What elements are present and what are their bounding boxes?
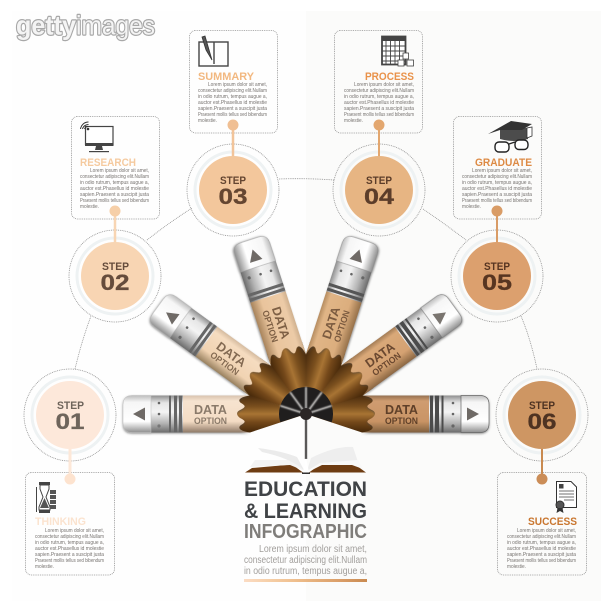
step 05 label: STEP xyxy=(484,261,510,273)
icon: hourglass xyxy=(36,482,56,513)
step 01 label: STEP xyxy=(57,400,84,412)
step 05 disc xyxy=(463,242,531,310)
book illustration xyxy=(245,447,366,474)
step 02: research xyxy=(69,116,161,322)
body text: process: in odio rutrum, tempus augue a, xyxy=(344,94,414,100)
body text: success: auctor est.Phasellus id molestie xyxy=(507,546,576,552)
step 02 ring xyxy=(69,230,161,322)
step 04 disc xyxy=(345,156,413,224)
step 05 label xyxy=(482,261,512,295)
step 03 label: STEP xyxy=(220,175,246,187)
icon: calculator and blocks xyxy=(382,36,414,66)
pencil 5 xyxy=(295,291,465,429)
watermark: getty images logo: images xyxy=(76,10,155,40)
body text: graduate: Lorem ipsum dolor sit amet, xyxy=(472,168,532,174)
step 04: process xyxy=(333,30,425,236)
body text: summary: auctor est.Phasellus id molestie xyxy=(198,100,267,106)
body text: research xyxy=(80,168,149,210)
body text: thinking: molestie. xyxy=(35,564,54,570)
step 06 connector xyxy=(536,449,548,484)
pencil 5: DATA xyxy=(363,340,398,371)
step 03 disc xyxy=(199,156,267,224)
step 01 label: 01 xyxy=(56,409,84,434)
step 03 label: 03 xyxy=(218,184,248,209)
step 02 label xyxy=(100,261,130,295)
watermark: getty images logo: getty xyxy=(16,10,76,40)
step 06 label: STEP xyxy=(529,400,555,412)
body text: summary: Praesent mollis tellus sed bibendum xyxy=(198,112,267,118)
pencil 4: DATA xyxy=(320,305,343,341)
heading: summary: SUMMARY xyxy=(198,71,255,83)
pencil 3: OPTION xyxy=(260,309,280,344)
body text: success: Praesent mollis tellus sed bibendum xyxy=(507,558,576,564)
watermark: getty images logo xyxy=(16,10,155,40)
body text: research: sapien.Praesent a suscipit justa xyxy=(80,192,149,198)
pencil 1 xyxy=(123,396,306,432)
body text: summary: Lorem ipsum dolor sit amet, xyxy=(208,82,267,88)
body text: success: in odio rutrum, tempus augue a, xyxy=(507,540,576,546)
body text: process: Praesent mollis tellus sed bibendum xyxy=(344,112,414,118)
pencil 5: OPTION xyxy=(370,350,403,378)
body text: thinking: in odio rutrum, tempus augue a, xyxy=(35,540,104,546)
body text: graduate: Praesent mollis tellus sed bibendum xyxy=(462,198,532,204)
step 02 label: STEP xyxy=(102,261,129,273)
body text: graduate: molestie. xyxy=(462,204,481,210)
step 06 disc xyxy=(508,381,576,449)
pencil 4 xyxy=(288,234,380,420)
body text: research: molestie. xyxy=(80,204,99,210)
heading: success: SUCCESS xyxy=(528,516,577,528)
body text: research: Praesent mollis tellus sed bibendum xyxy=(80,198,149,204)
intro text: in odio rutrum, tempus augue a, xyxy=(244,566,367,577)
icon: book and pen xyxy=(199,36,228,66)
step 03 label xyxy=(218,175,248,209)
info box: thinking xyxy=(26,472,114,575)
step 01: thinking xyxy=(24,369,116,575)
body text: thinking: sapien.Praesent a suscipit justa xyxy=(35,552,104,558)
step 01 connector xyxy=(64,449,76,484)
pencil 4: OPTION xyxy=(332,309,352,344)
heading: graduate: GRADUATE xyxy=(475,157,532,169)
step 01 disc xyxy=(36,381,104,449)
step 06 ring xyxy=(496,369,588,461)
intro text: consectetur adipiscing elit.Nullam xyxy=(244,555,367,566)
body text: process: Lorem ipsum dolor sit amet, xyxy=(354,82,414,88)
body text: graduate xyxy=(462,168,532,210)
body text: thinking: Lorem ipsum dolor sit amet, xyxy=(45,528,104,534)
body text: research: consectetur adipiscing elit.Nullam xyxy=(80,174,149,180)
stem from hub to book xyxy=(300,408,312,459)
step 06 label: 06 xyxy=(528,409,556,434)
step 05 label: 05 xyxy=(482,270,512,295)
body text: thinking: Praesent mollis tellus sed bibendum xyxy=(35,558,104,564)
heading: research: RESEARCH xyxy=(80,157,136,169)
body text: summary xyxy=(198,82,267,124)
step 03 ring xyxy=(187,144,279,236)
step 02 label: 02 xyxy=(100,270,130,295)
body text: success: consectetur adipiscing elit.Nullam xyxy=(507,534,576,540)
step 03: summary xyxy=(187,30,279,236)
step 06 label xyxy=(528,400,556,434)
step 03 connector xyxy=(228,120,238,158)
main title: EDUCATION xyxy=(244,478,367,501)
info box: summary xyxy=(190,30,278,133)
body text: graduate: consectetur adipiscing elit.Nullam xyxy=(462,174,532,180)
step 06: success xyxy=(496,369,588,575)
body text: graduate: in odio rutrum, tempus augue a, xyxy=(462,180,532,186)
step 01 ring xyxy=(24,369,116,461)
body text: research: in odio rutrum, tempus augue a, xyxy=(80,180,149,186)
step 02 disc xyxy=(81,242,149,310)
icon: monitor with wifi xyxy=(80,122,114,152)
body text: summary: sapien.Praesent a suscipit justa xyxy=(198,106,267,112)
main title: & LEARNING xyxy=(244,500,367,523)
body text: thinking xyxy=(35,528,104,570)
body text: summary: consectetur adipiscing elit.Nullam xyxy=(198,88,267,94)
body text: process: molestie. xyxy=(344,118,363,124)
step 05: graduate xyxy=(451,116,543,322)
heading: thinking: THINKING xyxy=(35,516,86,528)
body text: thinking: auctor est.Phasellus id molestie xyxy=(35,546,104,552)
body text: research: Lorem ipsum dolor sit amet, xyxy=(90,168,149,174)
dotted connectors between steps xyxy=(75,179,537,369)
body text: research: auctor est.Phasellus id molestie xyxy=(80,186,149,192)
pencil fan xyxy=(123,234,489,432)
pencil 3 xyxy=(232,234,324,420)
heading: process: PROCESS xyxy=(365,71,414,83)
main title xyxy=(244,478,367,543)
intro text: Lorem ipsum dolor sit amet, xyxy=(259,544,367,555)
body text: success: Lorem ipsum dolor sit amet, xyxy=(517,528,576,534)
pencil 3: DATA xyxy=(269,305,292,341)
pencil lead highlights xyxy=(280,387,332,414)
step 05 ring xyxy=(451,230,543,322)
step 02 connector xyxy=(110,206,120,243)
body text: graduate: sapien.Praesent a suscipit justa xyxy=(462,192,532,198)
body text: summary: molestie. xyxy=(198,118,217,124)
body text: process: sapien.Praesent a suscipit justa xyxy=(344,106,414,112)
step 04 label: STEP xyxy=(366,175,392,187)
step 04 ring xyxy=(333,144,425,236)
icon: certificate with seal xyxy=(556,482,576,513)
step 01 label xyxy=(56,400,84,434)
step 04 connector xyxy=(374,120,384,158)
gradient colour bar xyxy=(244,579,367,582)
main title: INFOGRAPHIC xyxy=(244,521,367,543)
icon: graduation cap and glasses xyxy=(488,121,532,152)
pencil 2 xyxy=(147,291,317,429)
pencil 1: OPTION xyxy=(194,416,227,426)
body text: process: auctor est.Phasellus id molestie xyxy=(344,100,414,106)
body text: graduate: auctor est.Phasellus id molestie xyxy=(462,186,532,192)
body text: success: sapien.Praesent a suscipit justa xyxy=(507,552,576,558)
pencil 2: OPTION xyxy=(208,350,241,377)
step 04 label: 04 xyxy=(364,184,395,209)
body text: thinking: consectetur adipiscing elit.Nullam xyxy=(35,534,104,540)
info box: success xyxy=(498,472,586,575)
step 05 connector xyxy=(492,206,502,243)
info box: process xyxy=(334,30,422,133)
body text: success xyxy=(507,528,576,570)
pencil 2: DATA xyxy=(214,339,249,370)
info box: research xyxy=(72,116,160,219)
pencil 6 xyxy=(306,396,489,432)
intro text xyxy=(244,544,367,577)
info box: graduate xyxy=(454,116,542,219)
step 04 label xyxy=(364,175,395,209)
body text: process: consectetur adipiscing elit.Nullam xyxy=(344,88,414,94)
body text: success: molestie. xyxy=(507,564,526,570)
pencil 6: OPTION xyxy=(385,416,418,426)
pencil 6: DATA xyxy=(385,403,418,417)
pencil 1: DATA xyxy=(194,403,227,417)
body text: summary: in odio rutrum, tempus augue a, xyxy=(198,94,267,100)
body text: process xyxy=(344,82,414,124)
